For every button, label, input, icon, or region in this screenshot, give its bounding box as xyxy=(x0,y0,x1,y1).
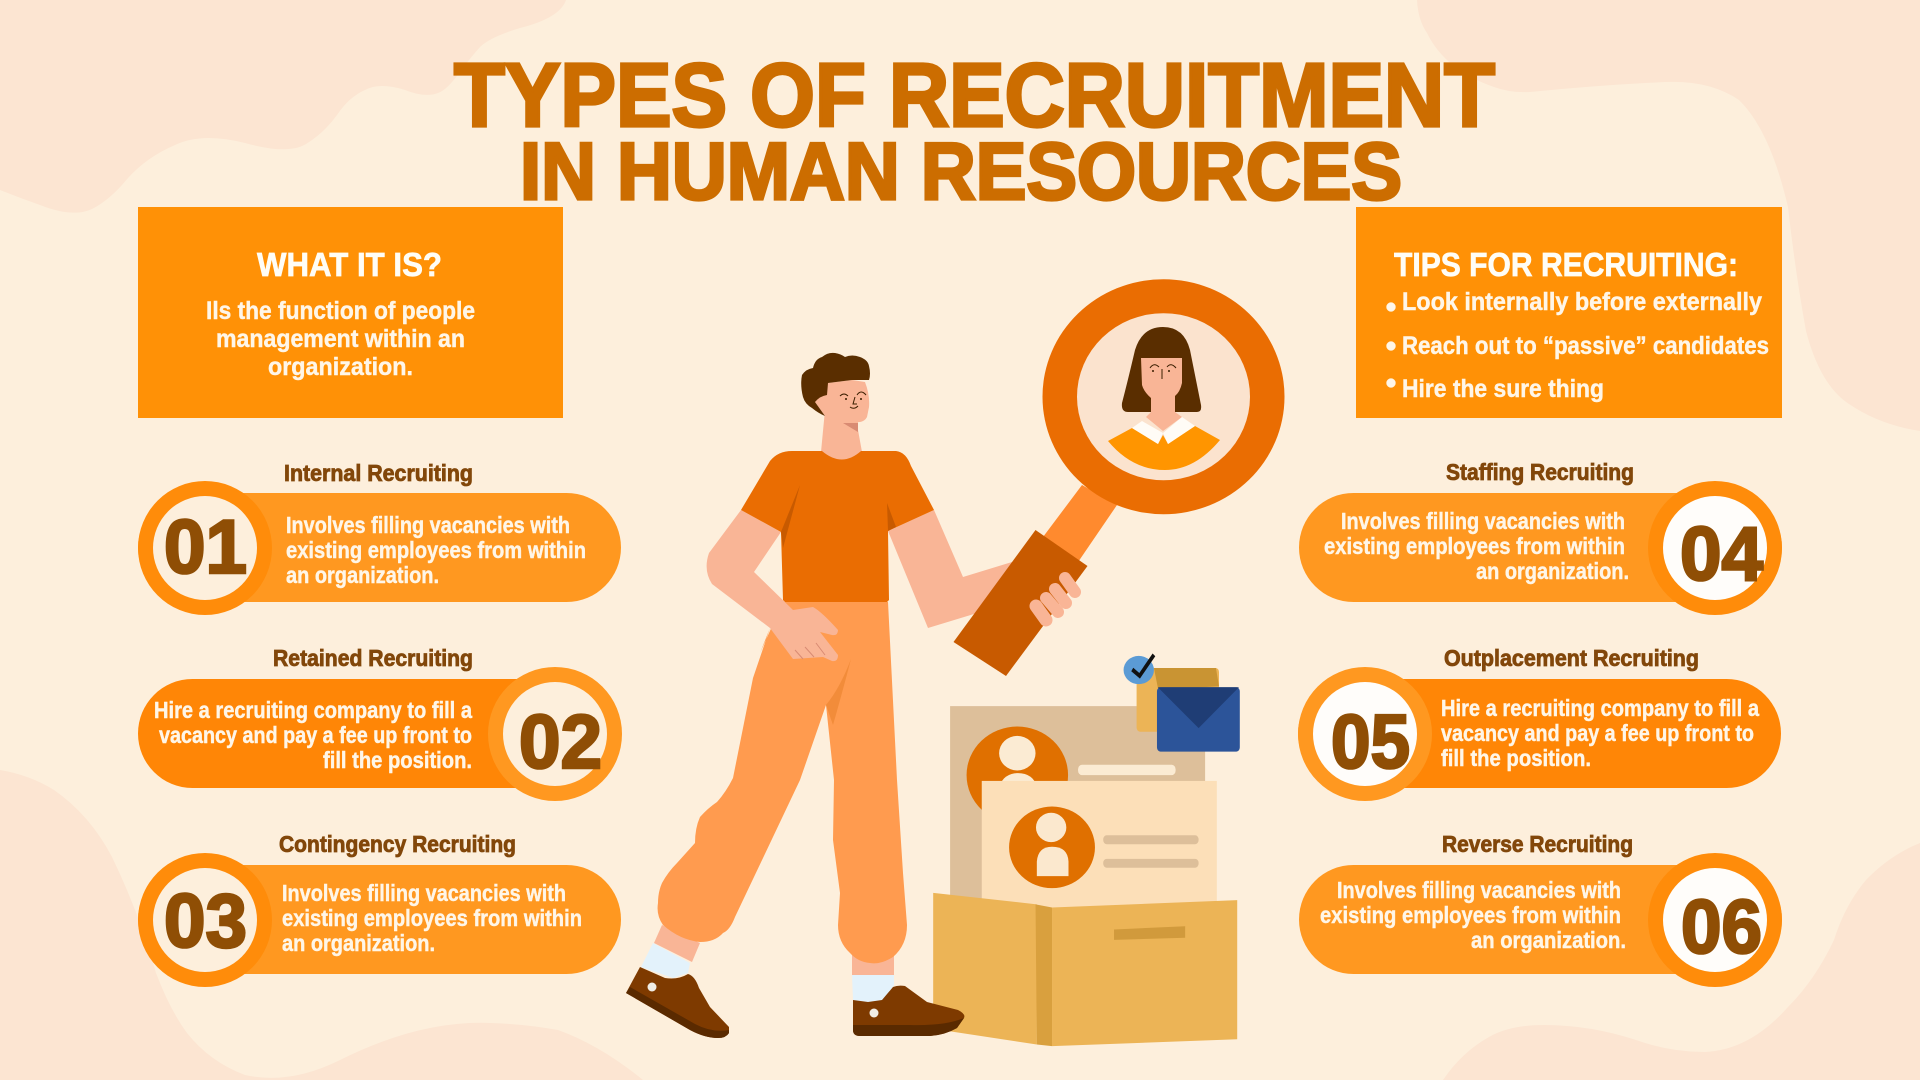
item 05: outplacement recruiting: vacancy and pay a fee up front to xyxy=(1441,720,1754,746)
candidate portrait xyxy=(1108,327,1220,470)
panel: what it is xyxy=(138,207,563,418)
definition text: Ils the function of people xyxy=(206,297,475,325)
item 01: internal recruiting: Involves filling vacancies with xyxy=(286,512,570,538)
icon: magnifying glass with candidate xyxy=(1042,279,1284,568)
trousers xyxy=(658,602,907,963)
item 03: contingency recruiting: Involves filling vacancies with xyxy=(282,880,566,906)
item 01: internal recruiting: an organization. xyxy=(286,562,439,588)
item 03: contingency recruiting: Contingency Recruiting xyxy=(279,831,516,857)
item 02: retained recruiting: vacancy and pay a fee up front to xyxy=(159,722,472,748)
item 02: retained recruiting: fill the position. xyxy=(323,747,472,773)
item 04: staffing recruiting xyxy=(1299,459,1782,615)
neck and head xyxy=(801,353,870,461)
item 02: retained recruiting: Hire a recruiting company to fill a xyxy=(154,697,473,723)
item 04: staffing recruiting: existing employees from within xyxy=(1324,533,1625,559)
left ankle, sock and shoe xyxy=(626,925,729,1038)
title: IN HUMAN RESOURCES xyxy=(520,127,1402,217)
icon: envelopes and check badge xyxy=(1124,655,1240,752)
item 03: contingency recruiting xyxy=(138,831,621,987)
definition text: organization. xyxy=(268,353,413,381)
item 01: internal recruiting: Internal Recruiting xyxy=(284,460,473,486)
illustration: recruiter with magnifier and candidate files xyxy=(626,279,1284,1046)
title xyxy=(454,46,1495,217)
item 05: outplacement recruiting: Hire a recruiting company to fill a xyxy=(1441,695,1760,721)
item 04: staffing recruiting: Staffing Recruiting xyxy=(1446,459,1634,485)
icon: magnifier grip and fingers xyxy=(954,530,1088,676)
title: TYPES OF RECRUITMENT xyxy=(454,46,1495,146)
icon: candidate cards xyxy=(950,706,1217,912)
item 03: contingency recruiting: existing employees from within xyxy=(282,905,582,931)
item 06: reverse recruiting: Involves filling vacancies with xyxy=(1337,877,1621,903)
background blob: bottom left xyxy=(0,770,643,1080)
heading: tips: TIPS FOR RECRUITING: xyxy=(1394,246,1738,283)
item 06: reverse recruiting: existing employees from within xyxy=(1320,902,1621,928)
tips list: Look internally before externally xyxy=(1402,288,1762,316)
arms xyxy=(707,510,1020,661)
item 06: reverse recruiting: 06 xyxy=(1681,885,1762,970)
item 05: outplacement recruiting: fill the position. xyxy=(1441,745,1591,771)
item 04: staffing recruiting: 04 xyxy=(1680,512,1763,597)
item 02: retained recruiting: Retained Recruiting xyxy=(273,645,473,671)
icon: man figure xyxy=(626,353,1020,1038)
item 01: internal recruiting xyxy=(138,460,621,615)
item 02: retained recruiting: 02 xyxy=(519,700,602,785)
background blob: top right xyxy=(1417,0,1920,431)
item 04: staffing recruiting: Involves filling vacancies with xyxy=(1341,508,1625,534)
item 03: contingency recruiting: 03 xyxy=(164,879,247,964)
tips list: Hire the sure thing xyxy=(1402,375,1604,403)
background blob: top left xyxy=(0,0,566,213)
item 05: outplacement recruiting: 05 xyxy=(1331,700,1410,785)
item 02: retained recruiting xyxy=(138,645,622,801)
tips list xyxy=(1386,288,1769,403)
background blob: bottom right xyxy=(1443,843,1920,1080)
item 05: outplacement recruiting: Outplacement Recruiting xyxy=(1444,645,1699,671)
item 04: staffing recruiting: an organization. xyxy=(1476,558,1629,584)
item 05: outplacement recruiting xyxy=(1298,645,1781,801)
tips list: Reach out to “passive” candidates xyxy=(1402,332,1769,360)
panel: tips for recruiting xyxy=(1356,207,1782,418)
right ankle, sock and shoe xyxy=(852,955,964,1036)
item 06: reverse recruiting: Reverse Recruiting xyxy=(1442,831,1633,857)
item 01: internal recruiting: 01 xyxy=(164,505,247,590)
definition text xyxy=(206,297,475,381)
icon: cardboard box xyxy=(933,893,1237,1046)
definition text: management within an xyxy=(216,325,465,353)
shirt xyxy=(741,451,934,602)
item 01: internal recruiting: existing employees from within xyxy=(286,537,586,563)
item 06: reverse recruiting xyxy=(1299,831,1782,987)
item 06: reverse recruiting: an organization. xyxy=(1471,927,1626,953)
heading: what it is: WHAT IT IS? xyxy=(257,246,442,283)
item 03: contingency recruiting: an organization. xyxy=(282,930,435,956)
